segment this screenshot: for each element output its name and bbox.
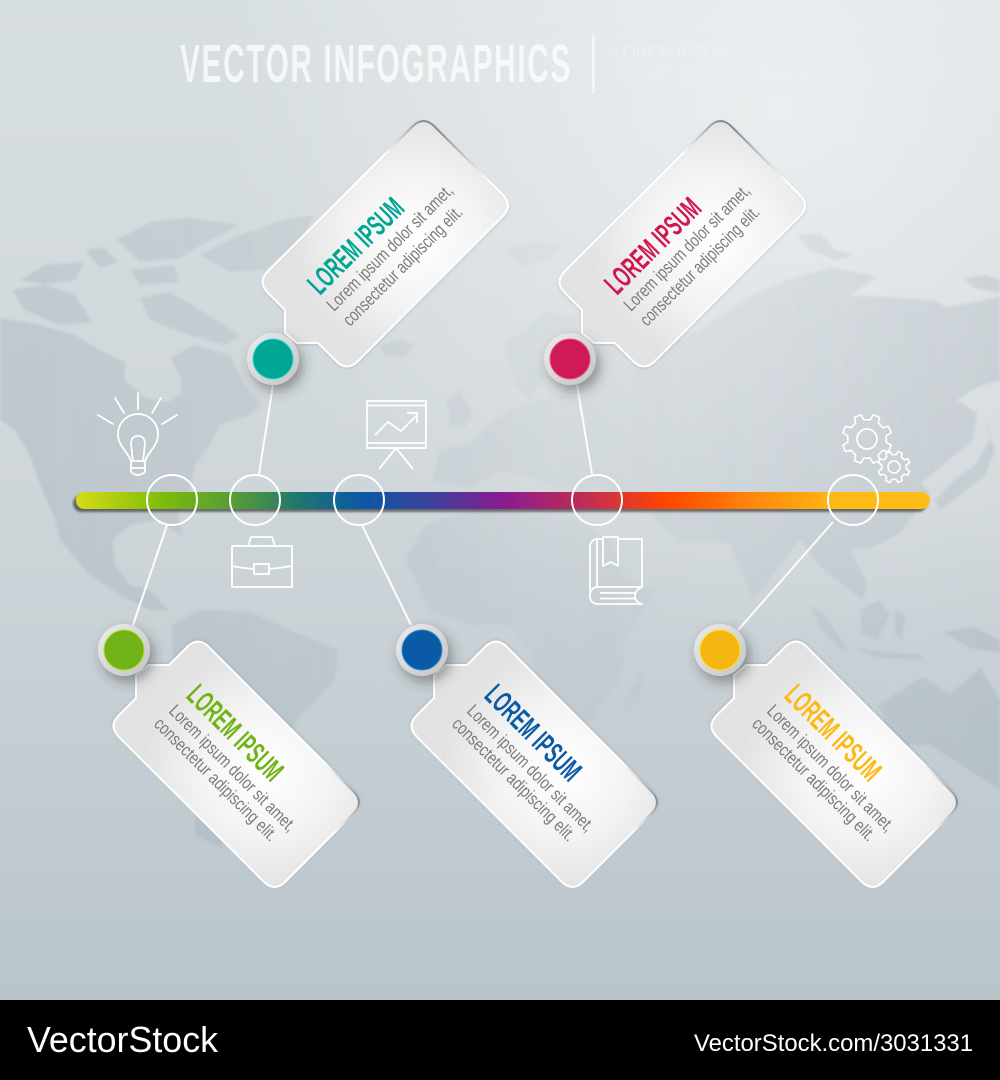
body text: yellow card: Lorem ipsum dolor sit amet, bbox=[763, 701, 898, 836]
title: VECTOR INFOGRAPHICS bbox=[180, 34, 572, 94]
title divider bbox=[592, 35, 595, 93]
body text: green card bbox=[150, 701, 300, 845]
panel: blue card bbox=[412, 642, 657, 887]
icon: gears bbox=[835, 407, 915, 488]
body text: teal card: Lorem ipsum dolor sit amet, bbox=[323, 180, 457, 315]
heading: teal: LOREM IPSUM bbox=[302, 191, 411, 301]
button: crimson bbox=[544, 333, 596, 385]
timeline bar bbox=[76, 492, 930, 509]
body text: blue card: consectetur adipiscing elit. bbox=[448, 714, 580, 845]
body text: blue card: Lorem ipsum dolor sit amet, bbox=[463, 701, 598, 836]
timeline rings bbox=[147, 475, 878, 525]
panel: teal card bbox=[262, 121, 508, 366]
body text: yellow card: consectetur adipiscing elit. bbox=[748, 714, 880, 845]
footer bar bbox=[0, 1000, 1000, 1080]
panel: yellow card bbox=[712, 642, 957, 887]
icon: briefcase bbox=[232, 537, 292, 587]
icon: presentation board bbox=[367, 401, 426, 469]
heading: blue: LOREM IPSUM bbox=[478, 679, 588, 788]
heading: crimson: LOREM IPSUM bbox=[599, 191, 708, 301]
body text: yellow card bbox=[748, 701, 898, 845]
body text: crimson card: Lorem ipsum dolor sit amet, bbox=[620, 180, 754, 315]
icon: book bbox=[590, 537, 642, 604]
button: yellow bbox=[694, 624, 746, 676]
button: blue bbox=[396, 624, 448, 676]
body text: teal card: consectetur adipiscing elit. bbox=[339, 202, 467, 330]
body text: green card: Lorem ipsum dolor sit amet, bbox=[165, 701, 300, 836]
heading: green: LOREM IPSUM bbox=[180, 679, 290, 788]
button: green bbox=[98, 624, 150, 676]
world map bbox=[0, 215, 1000, 848]
subtitle block: Morbi in mauris, vel lectus congue mauris bbox=[614, 62, 776, 71]
footer url: VectorStock.com/3031331 bbox=[694, 1030, 973, 1057]
panel: green card bbox=[114, 642, 359, 887]
body text: teal card bbox=[323, 180, 467, 330]
panel: crimson card bbox=[560, 121, 805, 366]
icon: light bulb bbox=[98, 393, 177, 475]
footer wordmark: VectorStock bbox=[27, 1019, 219, 1060]
subtitle block bbox=[614, 42, 816, 80]
heading: yellow: LOREM IPSUM bbox=[778, 679, 888, 788]
body text: crimson card: consectetur adipiscing elit. bbox=[636, 202, 764, 330]
body text: green card: consectetur adipiscing elit. bbox=[150, 714, 282, 845]
body text: crimson card bbox=[620, 180, 764, 330]
subtitle block: LOREM IPSUM bbox=[614, 42, 729, 61]
subtitle block: sem vestibulum enim ac blandit erat, sed eget diam bbox=[614, 71, 816, 80]
connector lines bbox=[132, 385, 833, 630]
body text: blue card bbox=[448, 701, 598, 845]
button: teal bbox=[247, 333, 299, 385]
